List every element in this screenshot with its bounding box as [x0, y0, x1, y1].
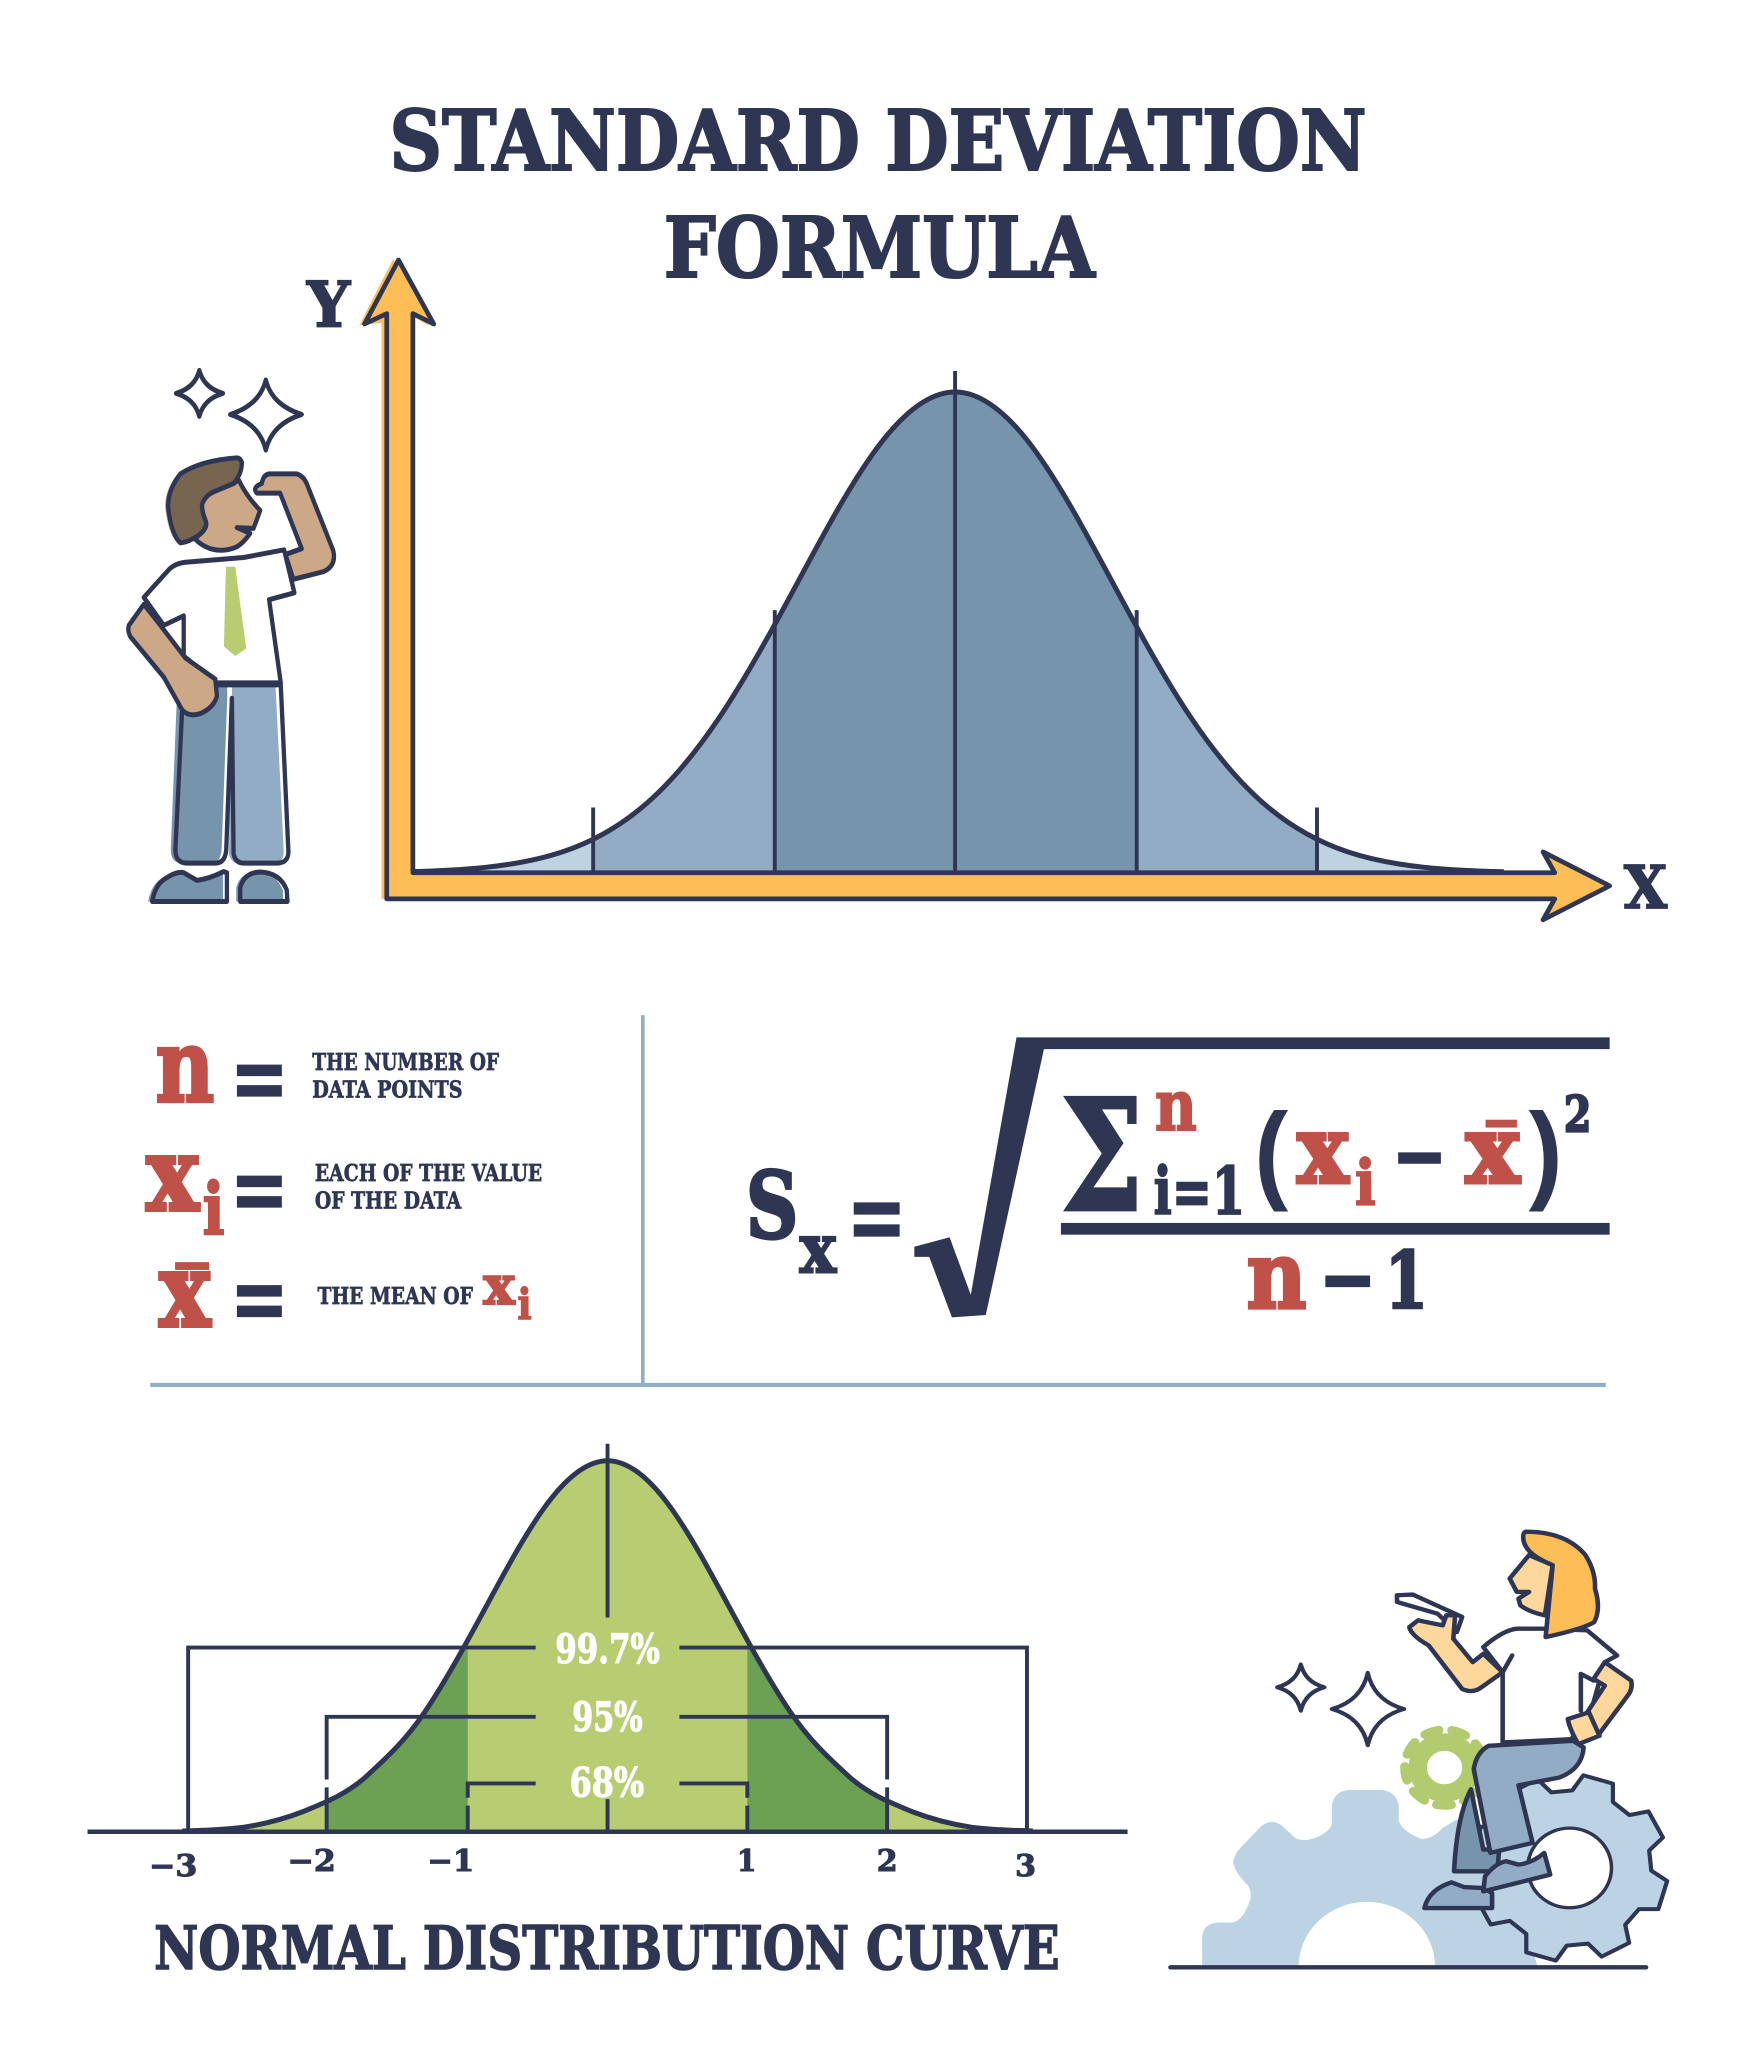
legend: x i: OF THE DATA — [315, 1187, 462, 1215]
man hair shadow — [165, 458, 239, 543]
numerator: ) — [1529, 1091, 1563, 1212]
legend: x bar: x — [483, 1254, 516, 1317]
man legs — [171, 685, 288, 863]
divider lines — [150, 1015, 1606, 1385]
man face — [195, 480, 260, 550]
formula — [746, 1037, 1610, 1331]
numerator: i=1 — [1154, 1154, 1245, 1230]
icon: green gear — [1405, 1730, 1484, 1805]
axis label Y: Y — [306, 268, 351, 342]
numerator: ( — [1254, 1091, 1288, 1212]
denominator — [1246, 1221, 1428, 1331]
formula left side: = — [847, 1158, 907, 1274]
numerator: Σ — [1061, 1066, 1143, 1247]
percent labels: 68% — [570, 1758, 644, 1806]
man shirt — [144, 550, 294, 683]
icon: woman sitting on gears — [1170, 1532, 1667, 1967]
legend: x i — [146, 1115, 542, 1252]
legend: x bar: x — [159, 1231, 211, 1351]
woman pointing arm — [1409, 1615, 1503, 1691]
radical sign — [914, 1037, 1610, 1317]
axis tick labels: −2 — [287, 1844, 336, 1879]
axis tick labels: 1 — [737, 1844, 756, 1879]
curve central area — [776, 394, 1135, 870]
numerator: x — [1466, 1095, 1520, 1205]
shirt fold line — [1581, 1674, 1594, 1711]
man right arm — [255, 474, 334, 579]
formula left side: x — [800, 1210, 837, 1290]
icon: man looking at the chart — [128, 370, 334, 901]
legend: n: DATA POINTS — [312, 1075, 463, 1103]
legend: n: THE NUMBER OF — [312, 1048, 499, 1076]
woman arm on hip — [1587, 1662, 1632, 1736]
icon: blue outlined gear — [1472, 1775, 1667, 1961]
curve outline — [182, 1461, 1033, 1831]
denominator: n — [1246, 1221, 1307, 1331]
title — [389, 91, 1367, 297]
legend: x bar: i — [517, 1281, 532, 1331]
arrow: x and y axes — [359, 259, 1610, 920]
man hair — [168, 458, 242, 543]
woman face — [1510, 1555, 1553, 1615]
man tie — [224, 567, 246, 656]
legend: x bar: THE MEAN OF — [317, 1282, 473, 1310]
legend: x i: EACH OF THE VALUE — [315, 1159, 542, 1187]
legend: n: = — [230, 1023, 289, 1131]
legend: x i: i — [203, 1168, 225, 1252]
axis tick labels: −1 — [427, 1844, 474, 1879]
numerator: x — [1297, 1095, 1349, 1205]
curve middle band area — [595, 633, 1315, 870]
legend: x i: = — [230, 1134, 289, 1242]
curve fill light green — [182, 1461, 1033, 1832]
formula left side: S — [746, 1151, 798, 1259]
axis label X: X — [1624, 853, 1668, 922]
woman back leg — [1454, 1789, 1499, 1871]
woman back shoe — [1424, 1882, 1492, 1908]
percent labels — [555, 1625, 660, 1806]
numerator: 2 — [1564, 1084, 1591, 1143]
legend: x bar — [159, 1231, 532, 1352]
chart: normal distribution curve — [88, 1444, 1128, 1884]
legend: x i: x — [146, 1115, 200, 1235]
woman hair — [1523, 1532, 1598, 1637]
man shoes — [148, 872, 287, 901]
numerator: n — [1155, 1064, 1197, 1147]
icon: sparkles — [176, 370, 302, 450]
woman torso — [1483, 1629, 1617, 1742]
denominator: 1 — [1385, 1235, 1428, 1327]
man left arm — [128, 604, 217, 715]
curve fill dark green band — [328, 1645, 886, 1830]
woman hand on hip — [1568, 1712, 1600, 1744]
denominator: − — [1320, 1234, 1376, 1323]
axis tick labels: −3 — [149, 1849, 197, 1884]
sigma tick lines — [593, 371, 1317, 873]
chart: main bell curve — [406, 371, 1504, 873]
icon: sparkles — [1277, 1665, 1404, 1745]
percent labels: 99.7% — [555, 1625, 660, 1673]
title: STANDARD DEVIATION — [389, 91, 1367, 190]
formula left side — [746, 1151, 907, 1290]
woman front leg — [1474, 1741, 1584, 1853]
axis tick labels — [149, 1844, 1036, 1884]
title: FORMULA — [664, 198, 1096, 297]
fraction bar — [1061, 1223, 1610, 1235]
icon: large pale gear — [1202, 1790, 1538, 1967]
axis tick labels: 2 — [877, 1844, 898, 1879]
icon: white gear hole — [1529, 1830, 1610, 1906]
legend: n: n — [155, 1006, 214, 1126]
curve fill central — [468, 1463, 748, 1830]
heading: normal distribution curve: NORMAL DISTRIBUTION CURVE — [154, 1914, 1060, 1984]
percent labels: 95% — [572, 1693, 643, 1741]
legend: x bar: = — [230, 1244, 289, 1352]
woman front shoe — [1483, 1853, 1550, 1891]
paper plane — [1397, 1595, 1462, 1632]
curve tails area — [480, 843, 1431, 870]
brackets and baseline — [88, 1444, 1128, 1832]
numerator: − — [1393, 1113, 1446, 1199]
ground line — [1170, 1961, 1646, 1974]
legend: n — [155, 1006, 499, 1131]
numerator — [1061, 1064, 1591, 1247]
curve outline — [406, 392, 1504, 872]
axis tick labels: 3 — [1015, 1849, 1036, 1884]
numerator: i — [1355, 1146, 1376, 1220]
